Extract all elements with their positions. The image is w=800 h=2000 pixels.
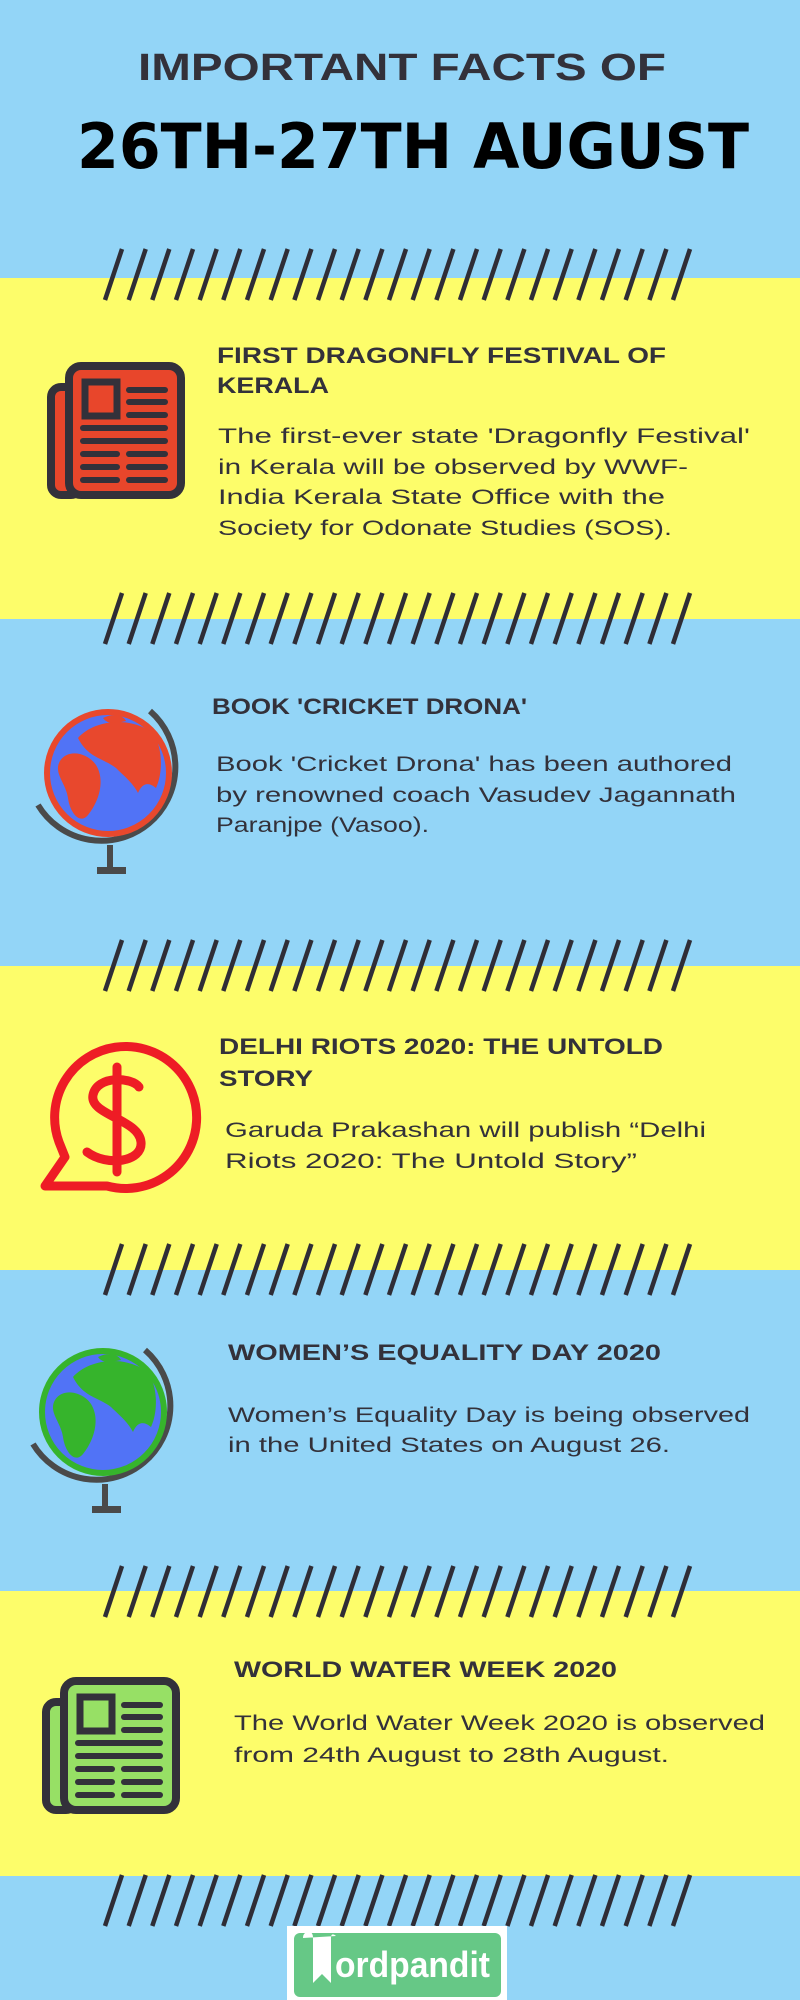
title: 26TH-27TH AUGUST: [77, 110, 749, 183]
icon: newspaper green: [46, 1681, 176, 1810]
text block: [234, 1712, 765, 1767]
text block: Society for Odonate Studies (SOS).: [218, 517, 672, 540]
logo: wordpandit: [287, 1926, 507, 2000]
heading: [217, 343, 666, 398]
heading: BOOK 'CRICKET DRONA': [212, 694, 527, 719]
icon: dollar speech bubble: [45, 1046, 197, 1188]
text block: Garuda Prakashan will publish “Delhi: [225, 1119, 706, 1142]
text block: Riots 2020: The Untold Story”: [225, 1150, 637, 1173]
text block: in Kerala will be observed by WWF-: [218, 456, 688, 479]
heading: WOMEN’S EQUALITY DAY 2020: [228, 1340, 661, 1365]
heading: FIRST DRAGONFLY FESTIVAL OF: [217, 343, 666, 368]
text block: [228, 1404, 750, 1457]
text block: The World Water Week 2020 is observed: [234, 1712, 765, 1735]
text block: by renowned coach Vasudev Jagannath: [216, 784, 736, 807]
text block: [216, 753, 736, 837]
text block: Book 'Cricket Drona' has been authored: [216, 753, 732, 776]
text block: India Kerala State Office with the: [218, 486, 665, 509]
heading: STORY: [219, 1066, 313, 1091]
panel: world water week: [46, 1657, 765, 1810]
icon: globe orange: [38, 711, 175, 874]
title: [77, 47, 749, 183]
heading: DELHI RIOTS 2020: THE UNTOLD: [219, 1034, 663, 1059]
text block: The first-ever state 'Dragonfly Festival': [218, 425, 750, 448]
title: IMPORTANT FACTS OF: [138, 47, 666, 89]
heading: [219, 1034, 663, 1091]
logo: wordpandit: ordpandit: [335, 1944, 490, 1985]
panel: delhi riots: [45, 1034, 706, 1188]
text block: [218, 425, 750, 540]
heading: WORLD WATER WEEK 2020: [234, 1657, 617, 1682]
panel: cricket drona: [38, 694, 736, 874]
text block: [225, 1119, 706, 1173]
text block: Paranjpe (Vasoo).: [216, 814, 429, 837]
text block: from 24th August to 28th August.: [234, 1744, 669, 1767]
panel: dragonfly festival: [51, 343, 750, 540]
text block: Women’s Equality Day is being observed: [228, 1404, 750, 1427]
text block: in the United States on August 26.: [228, 1434, 670, 1457]
icon: newspaper orange: [51, 366, 181, 495]
heading: KERALA: [217, 373, 329, 398]
icon: globe green: [33, 1350, 170, 1513]
panel: women's equality day: [33, 1340, 750, 1513]
